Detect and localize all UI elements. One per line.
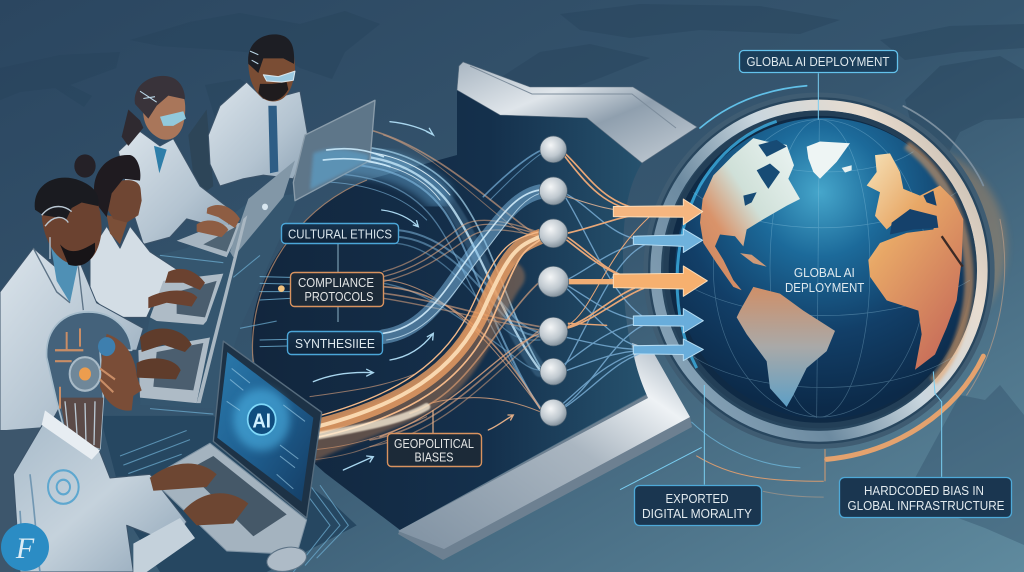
label: hardcoded bias	[840, 478, 1012, 518]
connector: geopolitical	[432, 410, 434, 433]
globe sphere	[675, 118, 972, 419]
ring: silver band	[656, 105, 982, 436]
connector lines	[620, 73, 942, 490]
globe centre label	[785, 265, 864, 295]
input streams from the screens	[260, 149, 390, 347]
orange glow	[807, 145, 1007, 348]
hands	[150, 463, 248, 525]
label: compliance protocols: COMPLIANCE	[298, 275, 374, 290]
label: global ai deployment	[740, 50, 898, 72]
label: compliance protocols	[290, 272, 384, 306]
thin portal arc	[252, 180, 367, 390]
ring: outer	[646, 95, 992, 446]
globe cyan rim	[677, 121, 777, 368]
laptop: silver notebook	[177, 161, 295, 257]
people, desks and laptops	[0, 34, 375, 572]
label: cultural ethics	[282, 224, 398, 244]
label: global ai deployment: GLOBAL AI DEPLOYMENT	[746, 54, 890, 69]
data flows: output fans	[563, 153, 663, 408]
globe warm limb	[907, 145, 969, 382]
mediterranean and red sea	[890, 191, 938, 235]
label: geopolitical biases: BIASES	[414, 450, 454, 464]
neural nodes	[538, 136, 569, 426]
label: hardcoded bias: HARDCODED BIAS IN	[864, 483, 984, 498]
metal frame	[398, 62, 697, 560]
laptop: back	[293, 100, 375, 201]
front desk	[100, 416, 357, 572]
label: exported digital morality	[634, 486, 762, 526]
label: synthesiiee	[288, 332, 382, 354]
lakes and bays	[743, 140, 787, 206]
person: woman with bun	[74, 154, 200, 317]
label: compliance protocols: PROTOCOLS	[304, 289, 374, 304]
data flows: nodes input side	[303, 130, 542, 460]
continent: south america	[737, 287, 835, 407]
portal panel	[252, 90, 648, 530]
caribbean islands	[740, 253, 767, 267]
label: exported digital morality: EXPORTED	[666, 491, 728, 506]
person: man with tie, back	[188, 34, 308, 193]
label: exported digital morality: DIGITAL MORALITY	[642, 506, 752, 521]
desk traces	[120, 255, 348, 572]
label: synthesiiee: SYNTHESIIEE	[295, 336, 375, 351]
globe centre label: DEPLOYMENT	[785, 280, 864, 295]
label: cultural ethics: CULTURAL ETHICS	[288, 226, 392, 242]
label: geopolitical biases: GEOPOLITICAL	[394, 436, 474, 451]
logo badge	[1, 523, 49, 571]
laptop: AI: AI	[252, 410, 271, 433]
continent: north america	[700, 138, 800, 290]
iceland	[842, 165, 852, 173]
label: geopolitical biases	[388, 434, 482, 466]
logo badge: F	[15, 532, 35, 565]
globe centre label: GLOBAL AI	[794, 265, 855, 280]
label: hardcoded bias: GLOBAL INFRASTRUCTURE	[848, 498, 1005, 513]
person: woman with glasses	[118, 76, 233, 244]
laptop: AI	[150, 341, 322, 555]
rear desk	[140, 193, 300, 409]
small flow arrows	[313, 122, 513, 470]
ring: inner dark	[666, 113, 974, 425]
globe assembly	[620, 73, 1007, 497]
mouse	[265, 544, 308, 572]
graticule	[678, 120, 970, 418]
output arrows	[613, 199, 707, 361]
person: cyborg front	[13, 312, 195, 572]
continent: greenland	[807, 142, 850, 179]
laptop: front-left	[137, 328, 210, 403]
connectors between left labels	[337, 244, 339, 322]
person: bearded man	[0, 178, 143, 572]
outer arcs	[692, 86, 1005, 497]
continent: eurasia and africa	[867, 153, 963, 370]
laptop: middle	[148, 215, 247, 403]
